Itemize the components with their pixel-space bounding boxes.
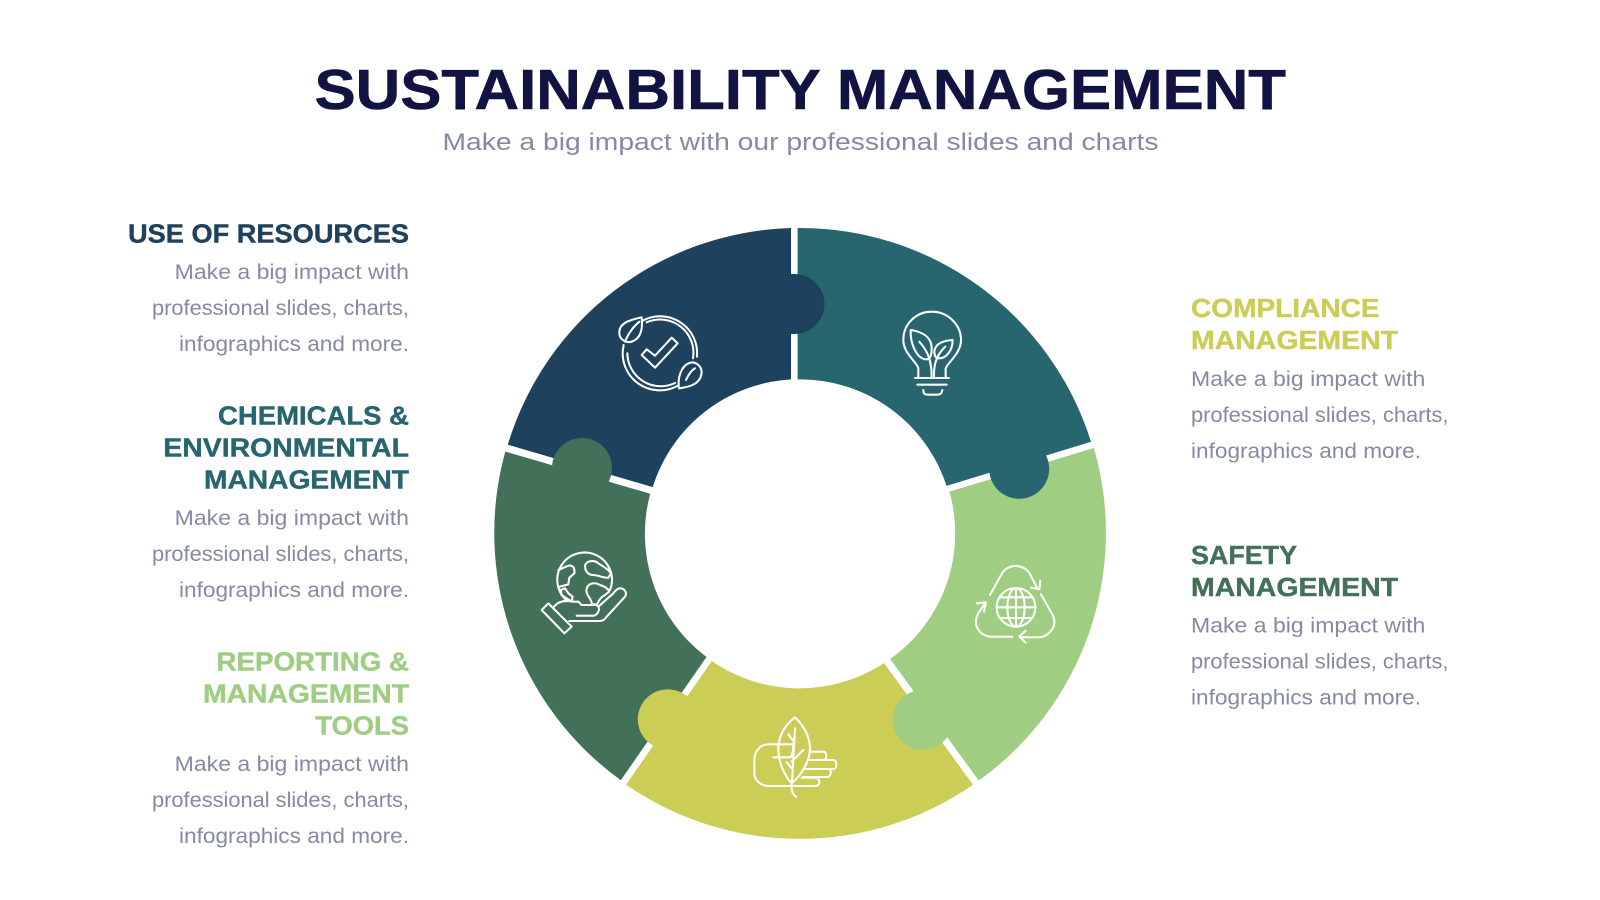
puzzle tab: light green: [893, 690, 953, 750]
puzzle tab: green: [552, 438, 612, 498]
text block: use of resources: professional slides, charts,: [152, 296, 409, 320]
segment: light green: [890, 448, 1106, 781]
heading: reporting and management tools: [203, 646, 409, 740]
heading: reporting and management tools: MANAGEMENT: [203, 678, 409, 708]
text block: use of resources: infographics and more.: [179, 332, 409, 356]
text block: compliance management: Make a big impact with: [1191, 367, 1425, 391]
text block: reporting and management tools: Make a big impact with: [175, 752, 409, 776]
title: SUSTAINABILITY MANAGEMENT: [314, 58, 1286, 122]
heading: reporting and management tools: TOOLS: [315, 710, 409, 740]
text block: safety management: Make a big impact with: [1191, 614, 1425, 638]
text block: reporting and management tools: infographics and more.: [179, 824, 409, 848]
segment: green: [494, 452, 706, 780]
text block: safety management: infographics and more.: [1191, 686, 1421, 710]
chart: puzzle ring: [494, 228, 1106, 839]
icon: light bulb with leaves: [903, 312, 961, 395]
puzzle tab: navy: [764, 274, 824, 334]
subtitle: Make a big impact with our professional slides and charts: [442, 129, 1158, 156]
heading: safety management: MANAGEMENT: [1191, 572, 1398, 602]
heading: chemicals and environmental management: [163, 400, 409, 494]
heading: compliance management: COMPLIANCE: [1191, 293, 1380, 323]
text block: compliance management: infographics and more.: [1191, 439, 1421, 463]
heading: chemicals and environmental management: MANAGEMENT: [204, 464, 409, 494]
text block: use of resources: Make a big impact with: [175, 260, 409, 284]
segment: olive: [626, 661, 973, 839]
heading: safety management: [1191, 540, 1398, 602]
heading: compliance management: MANAGEMENT: [1191, 325, 1398, 355]
segment: teal: [798, 228, 1091, 486]
heading: safety management: SAFETY: [1191, 540, 1297, 570]
text block: safety management: [1191, 614, 1448, 710]
puzzle tab: teal: [989, 439, 1049, 499]
text block: use of resources: [152, 260, 409, 356]
icon: leaves and check mark: [619, 316, 702, 390]
heading: chemicals and environmental management: ENVIRONMENTAL: [163, 432, 409, 462]
segment: navy: [508, 228, 791, 487]
panel: reporting and management tools: [152, 646, 409, 848]
panel: chemicals and environmental management: [152, 400, 409, 602]
text block: chemicals and environmental management: Make a big impact with: [175, 506, 409, 530]
heading: chemicals and environmental management: CHEMICALS &: [218, 400, 409, 430]
heading: reporting and management tools: REPORTING &: [216, 646, 409, 676]
panel: use of resources: [128, 219, 409, 356]
text block: reporting and management tools: [152, 752, 409, 848]
text block: chemicals and environmental management: infographics and more.: [179, 578, 409, 602]
text block: safety management: professional slides, charts,: [1191, 650, 1448, 674]
icon: hand holding earth: [542, 553, 626, 633]
icon: hand with leaf: [754, 717, 836, 797]
puzzle tab: olive: [638, 689, 698, 749]
text block: reporting and management tools: professional slides, charts,: [152, 788, 409, 812]
text block: chemicals and environmental management: professional slides, charts,: [152, 542, 409, 566]
panel: safety management: [1191, 540, 1448, 710]
heading: use of resources: USE OF RESOURCES: [128, 219, 409, 249]
text block: chemicals and environmental management: [152, 506, 409, 602]
icon: globe with recycling arrows: [976, 566, 1054, 643]
panel: compliance management: [1191, 293, 1448, 463]
text block: compliance management: [1191, 367, 1448, 463]
heading: compliance management: [1191, 293, 1398, 355]
text block: compliance management: professional slides, charts,: [1191, 403, 1448, 427]
